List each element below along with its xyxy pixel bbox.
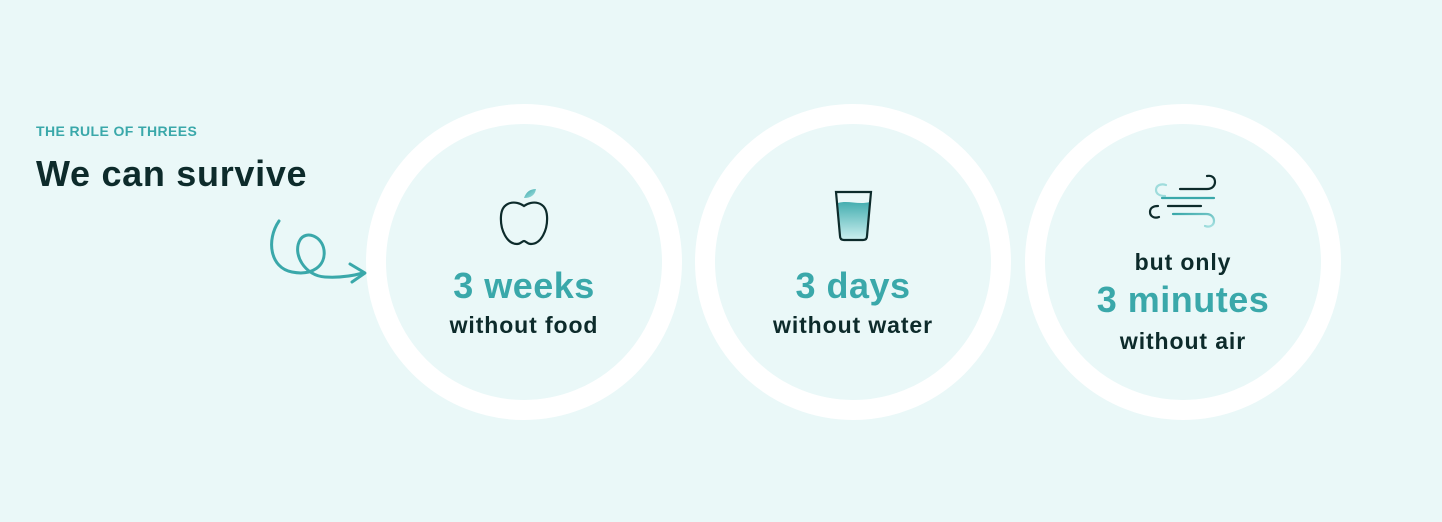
eyebrow: the rule of threes: THE RULE OF THREES <box>36 123 197 139</box>
text: but only 3 minutes: but only <box>1135 249 1231 275</box>
panel: air: 3 minutes <box>1097 279 1269 320</box>
text: 3 weeks: 3 weeks <box>453 265 595 306</box>
panel: air <box>1035 114 1331 410</box>
panel: food: without food <box>449 312 598 338</box>
arrow: swirl <box>272 221 365 282</box>
icon: apple <box>501 189 547 244</box>
title: We can survive <box>36 153 307 194</box>
panel: water: without water <box>772 312 933 338</box>
icon: glass <box>836 192 871 240</box>
panel: food <box>376 114 672 410</box>
panel: water <box>705 114 1001 410</box>
text: 3 days: 3 days <box>795 265 911 306</box>
panel: air: without air <box>1119 328 1246 354</box>
icon: wind <box>1150 176 1215 227</box>
